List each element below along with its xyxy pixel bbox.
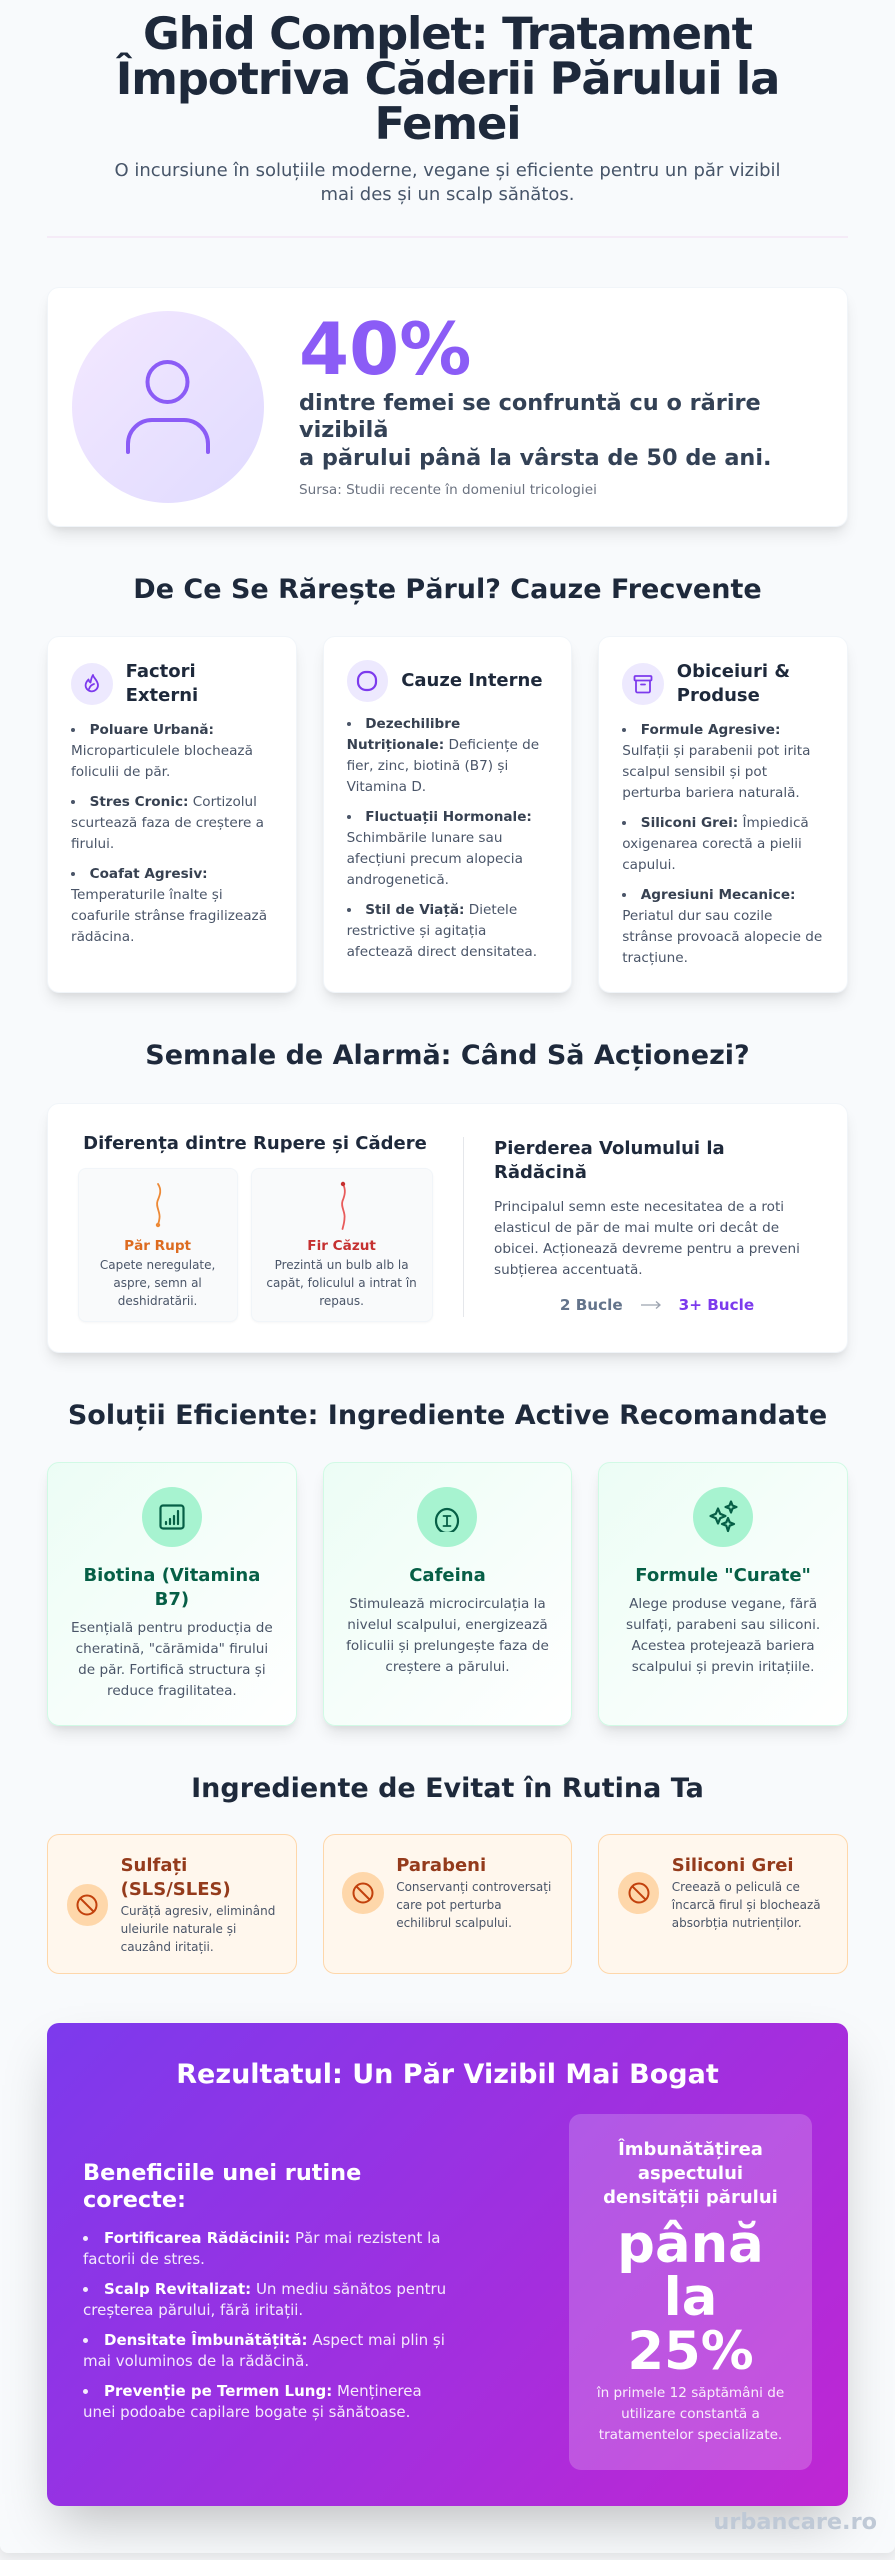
big number 40%: 40% (299, 307, 471, 391)
text (672, 1855, 821, 1930)
text: încarcă firul și blochează (672, 1898, 821, 1912)
paragraph (494, 1199, 800, 1278)
text: cauzând iritații. (121, 1940, 214, 1954)
subheading: Rădăcină (494, 1162, 587, 1183)
tile: broken hair: Păr Rupt (124, 1238, 191, 1254)
subheading (494, 1138, 725, 1183)
text: uleiurile naturale și (121, 1922, 236, 1936)
benefits list: Prevenție pe Termen Lung: Menținerea (104, 2382, 422, 2400)
icon: caffeine circle (417, 1486, 477, 1546)
tile: broken hair: aspre, semn al (113, 1276, 202, 1290)
ingredient name (83, 1564, 260, 1610)
text: Curăță agresiv, eliminând (121, 1904, 275, 1918)
icon: ban (342, 1872, 384, 1914)
icon: box (622, 663, 664, 705)
list (622, 722, 822, 966)
text: echilibrul scalpului. (396, 1916, 512, 1930)
tile: shed hair (251, 1168, 433, 1322)
highlight intro: Îmbunătățirea (618, 2138, 763, 2160)
benefits heading: corecte: (83, 2187, 186, 2213)
text: absorbția nutrienților. (672, 1916, 802, 1930)
panel: clean formulas (598, 1462, 848, 1726)
list: Coafat Agresiv: Temperaturile înalte și coafurile strânse fragilizează rădăcina. (71, 866, 267, 945)
list: Stres Cronic: Cortizolul scurtează faza de creștere a firului. (71, 794, 264, 852)
panel: internal causes (323, 636, 572, 993)
card heading: Factori (126, 661, 196, 682)
panel: 40% statistic (47, 287, 848, 527)
card heading: Obiceiuri & (677, 661, 790, 682)
ingredient name: Biotina (Vitamina (83, 1564, 260, 1586)
highlight intro: densității părului (603, 2186, 778, 2208)
icon: sparkles (693, 1486, 753, 1546)
highlight number: 25% (627, 2320, 754, 2382)
text: Sulfați (121, 1855, 187, 1876)
watermark: urbancare.ro (713, 2509, 877, 2535)
tile: broken hair: deshidratării. (118, 1294, 197, 1308)
description: Stimulează microcirculația la nivelul scalpului, energizează foliculii și prelungește faza de creștere a părului. (346, 1596, 549, 1675)
paragraph: Principalul semn este necesitatea de a roti (494, 1199, 784, 1215)
list (346, 716, 539, 960)
tile: shed hair: capăt, foliculul a intrat în (266, 1276, 417, 1290)
benefits list: Densitate Îmbunătățită: Aspect mai plin și (104, 2331, 445, 2349)
icon: person in circle (72, 311, 264, 503)
subtitle: O incursiune în soluțiile moderne, vegane și eficiente pentru un păr vizibil (114, 160, 781, 180)
panel: parabens (323, 1834, 572, 1974)
panel: heavy silicones (598, 1834, 848, 1974)
text (396, 1855, 551, 1930)
icon: flame (71, 663, 113, 705)
tile: broken hair: Capete neregulate, (100, 1258, 215, 1272)
benefits list: creșterea părului, fără iritații. (83, 2301, 303, 2319)
text: care pot perturba (396, 1898, 502, 1912)
ingredient name: B7) (155, 1588, 189, 1610)
text block: root volume loss (494, 1138, 800, 1278)
title (116, 7, 779, 150)
panel: habits and products (598, 636, 848, 993)
list: Poluare Urbană: Microparticulele blochează foliculii de păr. (71, 722, 253, 780)
heading: solutions: Soluții Eficiente: Ingrediente Active Recomandate (68, 1400, 827, 1431)
title: Femei (374, 97, 520, 150)
statistic text: dintre femei se confruntă cu o rărire (299, 390, 761, 416)
panel: sulfates (47, 1834, 297, 1974)
subheading: Pierderea Volumului la (494, 1138, 725, 1159)
description: Alege produse vegane, fără sulfați, parabeni sau siliconi. Acestea protejează bariera scalpului și previn iritațiile. (626, 1596, 820, 1675)
icon: ban (618, 1872, 659, 1914)
highlight note (596, 2385, 784, 2443)
heading: warning signs: Semnale de Alarmă: Când Să Acționezi? (145, 1040, 750, 1071)
card heading (622, 661, 790, 706)
text: (SLS/SLES) (121, 1879, 231, 1900)
heading: causes: De Ce Se Rărește Părul? Cauze Frecvente (133, 574, 762, 604)
icon: ring (347, 660, 388, 702)
list (70, 722, 267, 945)
icon: ban (67, 1884, 108, 1926)
result heading: Rezultatul: Un Păr Vizibil Mai Bogat (176, 2058, 719, 2090)
paragraph: subțierea accentuată. (494, 1262, 643, 1278)
highlight box (569, 2114, 812, 2470)
icon: shed strand with bulb (340, 1182, 346, 1230)
panel: external factors (47, 636, 297, 993)
text: Conservanți controversați (396, 1880, 551, 1894)
card heading (71, 661, 198, 706)
highlight intro: aspectului (638, 2162, 743, 2184)
subtitle: mai des și un scalp sănătos. (320, 184, 574, 205)
benefits list: factorii de stres. (83, 2250, 205, 2268)
paragraph: obicei. Acționează devreme pentru a preveni (494, 1241, 800, 1257)
ingredient name: Cafeina (409, 1564, 486, 1586)
list: Siliconi Grei: Împiedică oxigenarea corectă a pielii capului. (622, 815, 809, 873)
comparison: elastic loops (560, 1296, 754, 1314)
list: Stil de Viață: Dietele restrictive și agitația afectează direct densitatea. (347, 902, 537, 960)
highlight note: tratamentelor specializate. (599, 2427, 782, 2443)
benefits list: Scalp Revitalizat: Un mediu sănătos pentru (104, 2280, 446, 2298)
benefits heading (83, 2160, 361, 2213)
subtitle (114, 160, 781, 205)
list: Dezechilibre Nutriționale: Deficiențe de fier, zinc, biotină (B7) și Vitamina D. (347, 716, 539, 795)
comparison: elastic loops: 2 Bucle (560, 1296, 623, 1314)
benefits list (83, 2229, 446, 2421)
tile: shed hair: Prezintă un bulb alb la (275, 1258, 409, 1272)
highlight note: utilizare constantă a (621, 2406, 760, 2422)
card heading (347, 660, 543, 702)
text (121, 1855, 275, 1954)
comparison: elastic loops: 3+ Bucle (679, 1296, 754, 1314)
list: Agresiuni Mecanice: Periatul dur sau cozile strânse provoacă alopecie de tracțiune. (622, 887, 822, 966)
icon: chart (142, 1486, 202, 1546)
benefits list: Fortificarea Rădăcinii: Păr mai rezistent la (104, 2229, 440, 2247)
benefits list: unei podoabe capilare bogate și sănătoase. (83, 2403, 410, 2421)
tile: shed hair: repaus. (319, 1294, 364, 1308)
panel: biotin (47, 1462, 297, 1726)
card heading: Cauze Interne (401, 670, 543, 691)
statistic text: a părului până la vârsta de 50 de ani. (299, 444, 772, 470)
ingredient name: Formule "Curate" (635, 1564, 811, 1586)
highlight number: la (664, 2267, 717, 2328)
icon: broken strand (156, 1183, 162, 1228)
card heading: Produse (677, 685, 760, 706)
benefits list: mai voluminos de la rădăcină. (83, 2352, 309, 2370)
tile: broken hair (78, 1168, 238, 1322)
title: Împotriva Căderii Părului la (116, 52, 779, 105)
text: Creează o peliculă ce (672, 1880, 800, 1894)
description: Esențială pentru producția de cheratină, "cărămida" firului de păr. Fortifică structura și reduce fragilitatea. (71, 1620, 273, 1699)
source note: Sursa: Studii recente în domeniul tricologiei (299, 482, 597, 498)
subheading: breakage vs shedding: Diferența dintre Rupere și Cădere (83, 1133, 427, 1154)
arrow (641, 1301, 661, 1309)
highlight number: până (617, 2214, 764, 2274)
panel: caffeine (323, 1462, 572, 1726)
benefits heading: Beneficiile unei rutine (83, 2160, 361, 2186)
heading: ingredients to avoid: Ingrediente de Evitat în Rutina Ta (191, 1773, 704, 1804)
highlight number (617, 2214, 764, 2382)
highlight note: în primele 12 săptămâni de (597, 2385, 784, 2401)
text: Parabeni (396, 1855, 486, 1876)
panel: result (47, 2023, 848, 2506)
list: Fluctuații Hormonale: Schimbările lunare sau afecțiuni precum alopecia androgenetică. (347, 809, 532, 888)
highlight intro (603, 2138, 778, 2208)
list: Formule Agresive: Sulfații și parabenii pot irita scalpul sensibil și pot perturba bariera naturală. (622, 722, 810, 801)
paragraph: elasticul de păr de mai multe ori decât de (494, 1220, 779, 1236)
statistic text (299, 390, 772, 470)
panel: warning signs (47, 1103, 848, 1353)
tile: shed hair: Fir Căzut (307, 1238, 376, 1254)
text: Siliconi Grei (672, 1855, 794, 1876)
title: Ghid Complet: Tratament (143, 7, 752, 60)
card heading: Externi (126, 685, 198, 706)
statistic text: vizibilă (299, 417, 388, 443)
